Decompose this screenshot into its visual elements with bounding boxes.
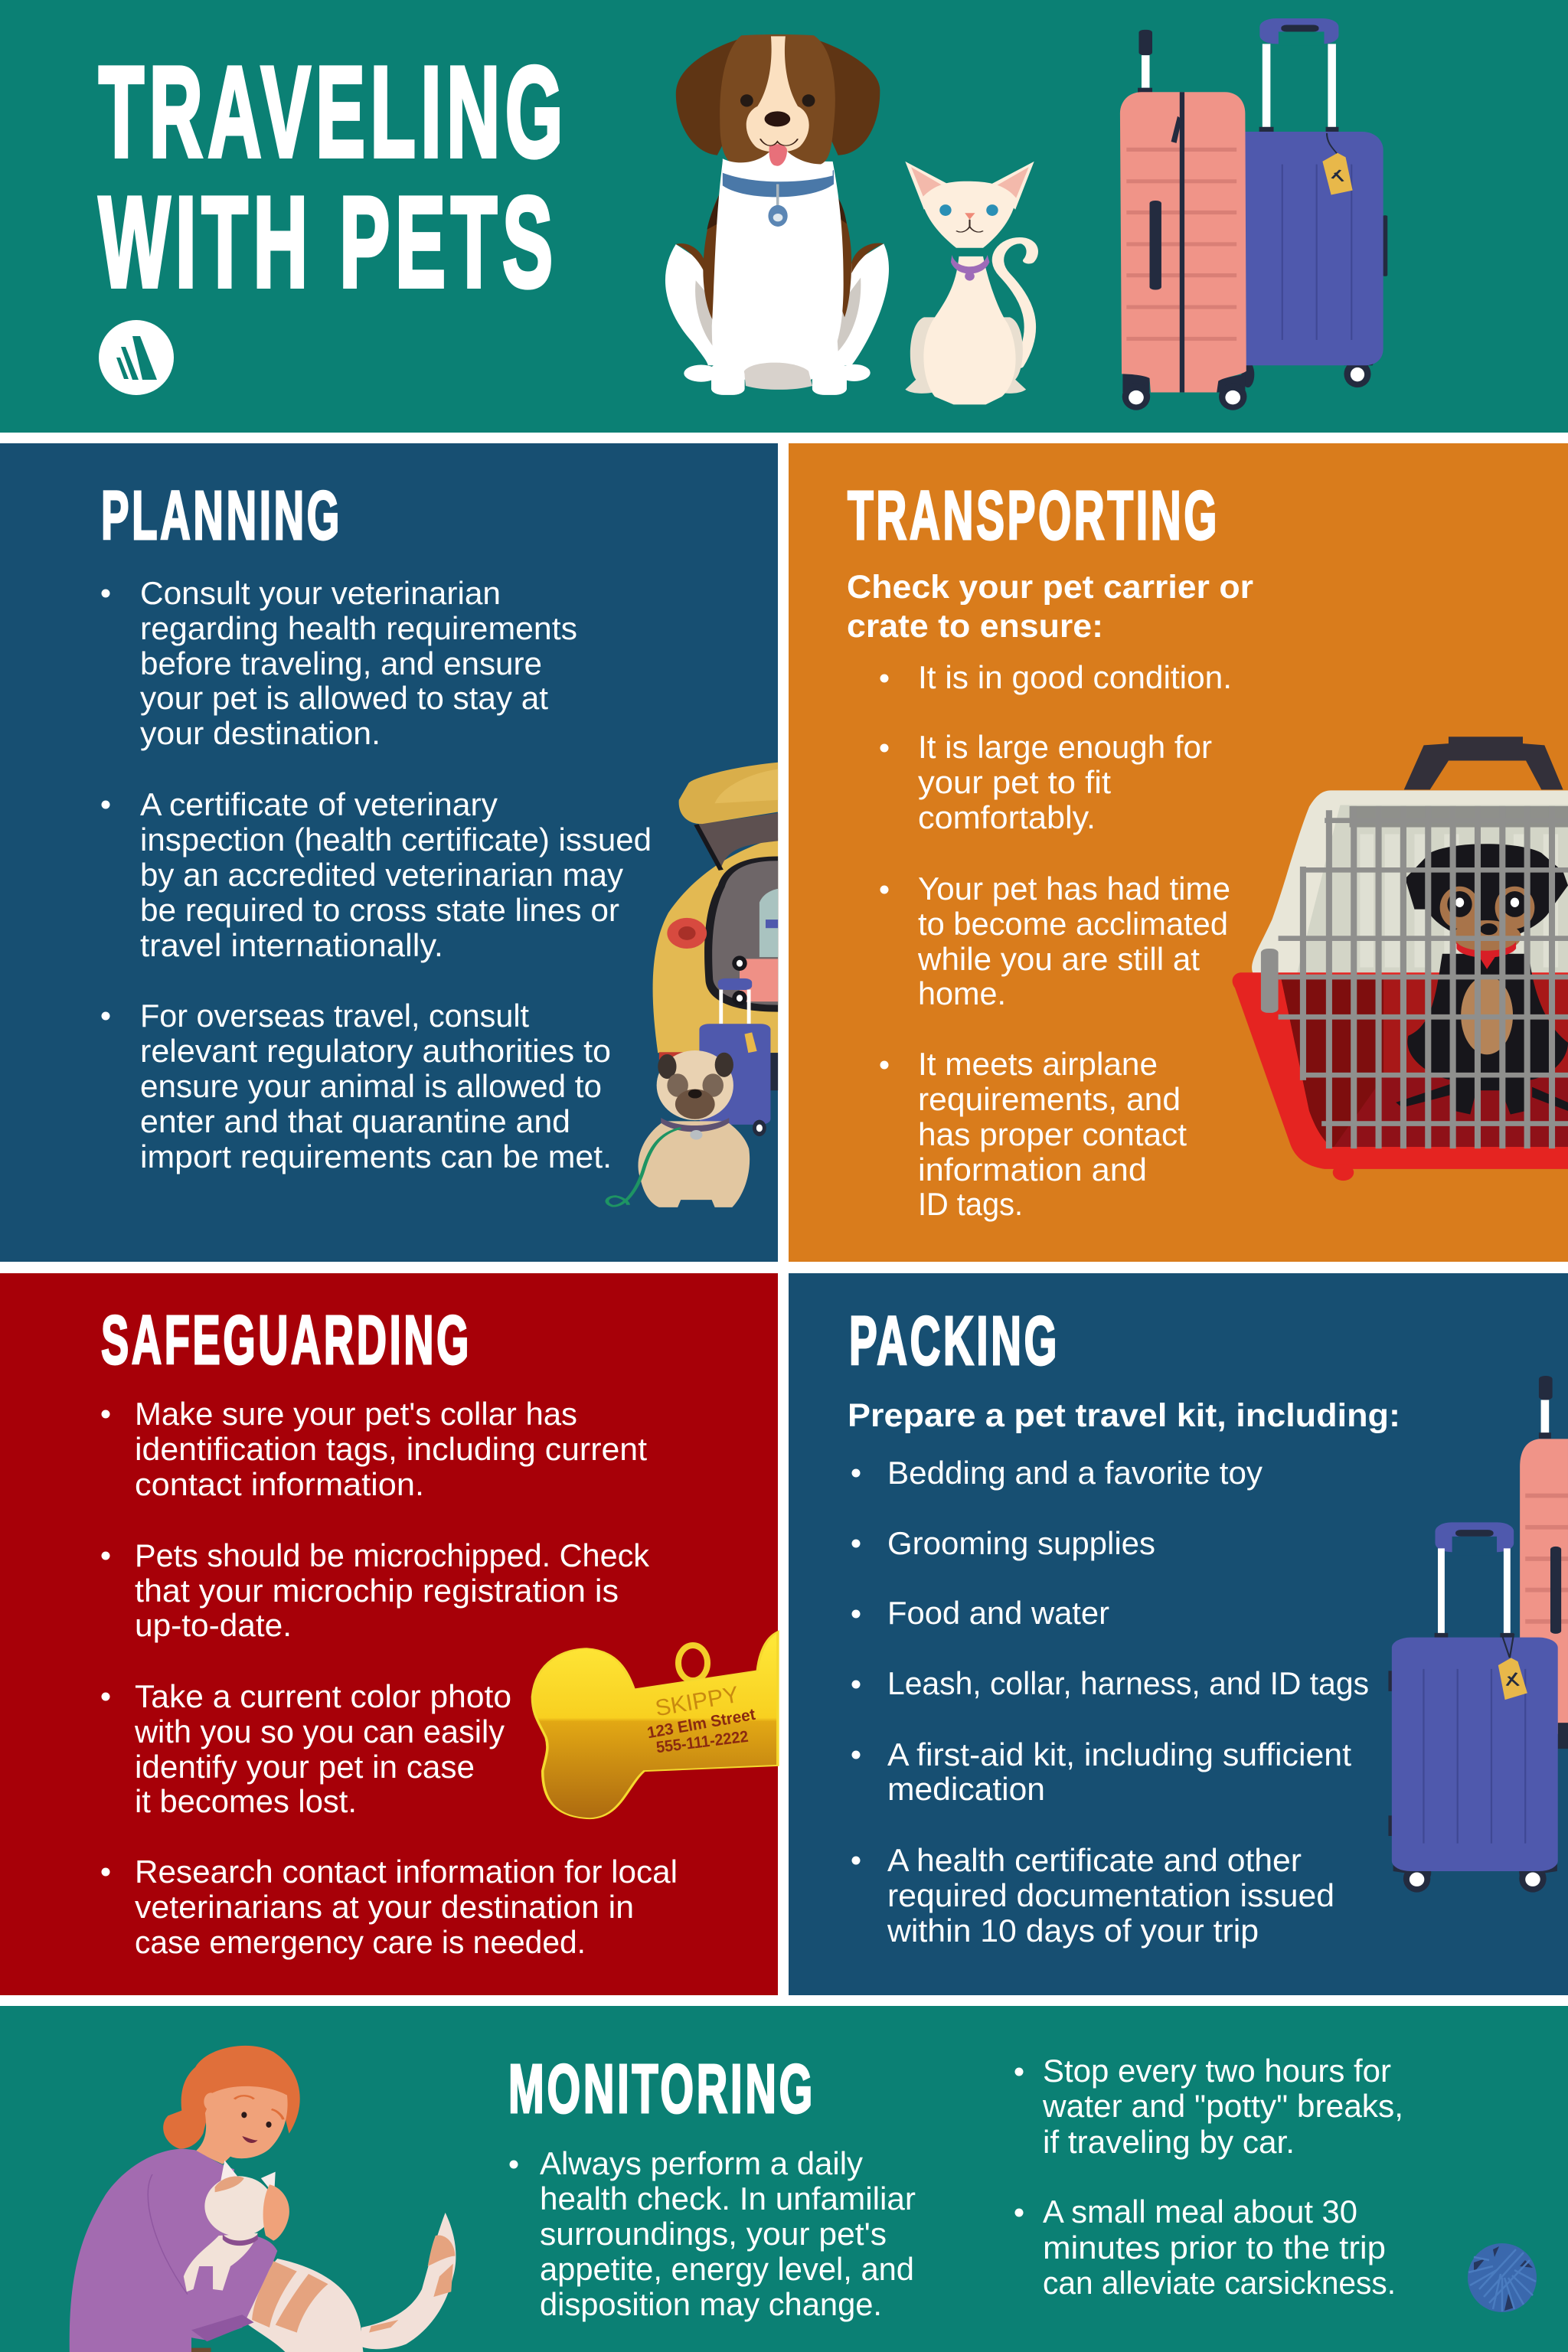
illustration: suitcases: [1388, 1376, 1568, 1893]
monitoring background: [0, 2006, 1568, 2352]
illustration: bone-shaped ID tag: 123 Elm Street: [645, 1706, 756, 1742]
bullet list: planning: relevant regulatory authorities to: [140, 1033, 611, 1069]
safeguarding background: [0, 1273, 778, 1995]
bullet list: transporting: It is large enough for: [918, 729, 1212, 765]
bullet list: monitoring left: Always perform a daily: [540, 2145, 863, 2181]
panel: monitoring: [0, 2006, 1568, 2352]
transporting background: [789, 443, 1568, 1262]
bullet list: packing: A first-aid kit, including sufficient: [887, 1736, 1351, 1772]
subheading: transporting: crate to ensure:: [847, 608, 1103, 645]
bullet list: planning: be required to cross state lines or: [140, 892, 619, 928]
bullet list: monitoring right: can alleviate carsickness.: [1043, 2265, 1396, 2301]
panel: transporting: [789, 443, 1568, 1262]
bullet list: planning: before traveling, and ensure: [140, 645, 542, 681]
bullet list: safeguarding: veterinarians at your destination in: [135, 1889, 634, 1925]
bullet list: transporting: to become acclimated: [918, 906, 1228, 942]
bullet list: transporting: ID tags.: [918, 1186, 1023, 1222]
bullet list: transporting: home.: [918, 975, 1006, 1011]
bullet list: planning: Consult your veterinarian: [140, 575, 501, 611]
bullet list: safeguarding: case emergency care is needed.: [135, 1924, 586, 1960]
bullet list: transporting: It is in good condition.: [918, 659, 1232, 695]
bullet list: planning: your destination.: [140, 715, 381, 751]
illustration: bone-shaped ID tag: SKIPPY: [653, 1682, 740, 1721]
bullet list: transporting: your pet to fit: [918, 764, 1111, 800]
packing background: [789, 1273, 1568, 1995]
bullet list: planning: travel internationally.: [140, 927, 443, 963]
bullet list: packing: medication: [887, 1771, 1045, 1807]
bullet list: planning: A certificate of veterinary: [140, 786, 498, 822]
bullet list: planning: [101, 575, 652, 1174]
bullet list: packing: Food and water: [887, 1595, 1109, 1631]
bullet list: safeguarding: identification tags, including current: [135, 1431, 647, 1467]
panel: packing: [789, 1273, 1568, 1995]
bullet list: safeguarding: contact information.: [135, 1466, 424, 1502]
bullet list: monitoring left: [510, 2145, 916, 2322]
bullet list: safeguarding: Research contact information for local: [135, 1854, 678, 1890]
bullet list: packing: [851, 1455, 1369, 1949]
bullet list: monitoring right: if traveling by car.: [1043, 2124, 1295, 2160]
illustration: cat: [905, 162, 1034, 404]
illustration: suitcases: [1120, 18, 1387, 410]
title: [99, 40, 568, 314]
bullet list: monitoring right: [1015, 2053, 1403, 2301]
bullet list: planning: regarding health requirements: [140, 610, 577, 646]
bullet list: planning: ensure your animal is allowed to: [140, 1068, 602, 1104]
heading: safeguarding: SAFEGUARDING: [101, 1302, 472, 1379]
bullet list: monitoring right: A small meal about 30: [1043, 2194, 1357, 2230]
bullet list: safeguarding: Make sure your pet's collar has: [135, 1396, 577, 1432]
bullet list: transporting: information and: [918, 1152, 1147, 1187]
bullet list: transporting: has proper contact: [918, 1116, 1187, 1152]
title: WITH PETS: [99, 170, 558, 314]
bullet list: packing: A health certificate and other: [887, 1842, 1302, 1878]
bullet list: planning: For overseas travel, consult: [140, 998, 529, 1034]
bullet list: monitoring left: disposition may change.: [540, 2286, 882, 2322]
bullet list: transporting: comfortably.: [918, 799, 1096, 835]
bullet list: safeguarding: Pets should be microchipped. Check: [135, 1537, 650, 1573]
illustration: pet crate with dog: [1233, 737, 1568, 1181]
header background: [0, 0, 1568, 433]
bullet list: safeguarding: it becomes lost.: [135, 1783, 357, 1819]
bullet list: transporting: while you are still at: [917, 941, 1200, 977]
bullet list: packing: within 10 days of your trip: [887, 1913, 1259, 1949]
bullet list: transporting: Your pet has had time: [918, 871, 1230, 906]
bullet list: monitoring left: health check. In unfamiliar: [540, 2180, 916, 2216]
title: TRAVELING: [99, 40, 568, 184]
bullet list: planning: your pet is allowed to stay at: [140, 680, 548, 716]
bullet list: planning: enter and that quarantine and: [140, 1103, 570, 1139]
bullet list: planning: inspection (health certificate) issued: [140, 822, 652, 858]
heading: transporting: TRANSPORTING: [848, 478, 1220, 554]
bullet list: safeguarding: Take a current color photo: [135, 1678, 511, 1714]
bullet list: safeguarding: that your microchip registration is: [135, 1573, 619, 1609]
bullet list: monitoring right: minutes prior to the trip: [1043, 2230, 1386, 2265]
subheading: packing: Prepare a pet travel kit, including:: [848, 1397, 1400, 1434]
bullet list: safeguarding: up-to-date.: [135, 1607, 292, 1643]
icon: yarn ball: [1468, 2243, 1537, 2312]
icon: logo: [99, 320, 174, 395]
heading: planning: PLANNING: [101, 478, 342, 554]
bullet list: packing: Bedding and a favorite toy: [887, 1455, 1263, 1491]
illustration: woman hugging cat: [70, 2046, 456, 2352]
illustration: dog: [665, 34, 889, 395]
bullet list: monitoring right: water and "potty" breaks,: [1042, 2088, 1403, 2124]
bullet list: transporting: [880, 659, 1232, 1222]
bullet list: packing: required documentation issued: [887, 1877, 1334, 1913]
bullet list: monitoring right: Stop every two hours for: [1043, 2053, 1391, 2089]
panel: planning: [0, 443, 778, 1262]
illustration: bone-shaped ID tag: [532, 1632, 778, 1818]
heading: monitoring: MONITORING: [508, 2051, 815, 2128]
bullet list: packing: Grooming supplies: [887, 1525, 1155, 1561]
illustration: car trunk, suitcase and pug: [607, 763, 778, 1207]
illustration: bone-shaped ID tag: 555-111-2222: [655, 1728, 750, 1756]
panel: safeguarding: [0, 1273, 778, 1995]
bullet list: packing: Leash, collar, harness, and ID tags: [887, 1665, 1369, 1701]
heading: packing: PACKING: [849, 1303, 1060, 1380]
panel: header: [0, 0, 1568, 433]
bullet list: monitoring left: appetite, energy level, and: [540, 2251, 914, 2287]
planning background: [0, 443, 778, 1262]
subheading: transporting: Check your pet carrier or: [847, 569, 1253, 606]
bullet list: transporting: requirements, and: [918, 1081, 1181, 1117]
bullet list: monitoring left: surroundings, your pet's: [540, 2216, 887, 2252]
bullet list: safeguarding: with you so you can easily: [134, 1713, 505, 1749]
bullet list: safeguarding: [101, 1396, 678, 1960]
bullet list: safeguarding: identify your pet in case: [135, 1749, 475, 1785]
bullet list: planning: by an accredited veterinarian may: [140, 857, 623, 893]
bullet list: transporting: It meets airplane: [918, 1046, 1158, 1082]
bullet list: planning: import requirements can be met.: [140, 1138, 612, 1174]
subheading: transporting: [847, 569, 1253, 645]
